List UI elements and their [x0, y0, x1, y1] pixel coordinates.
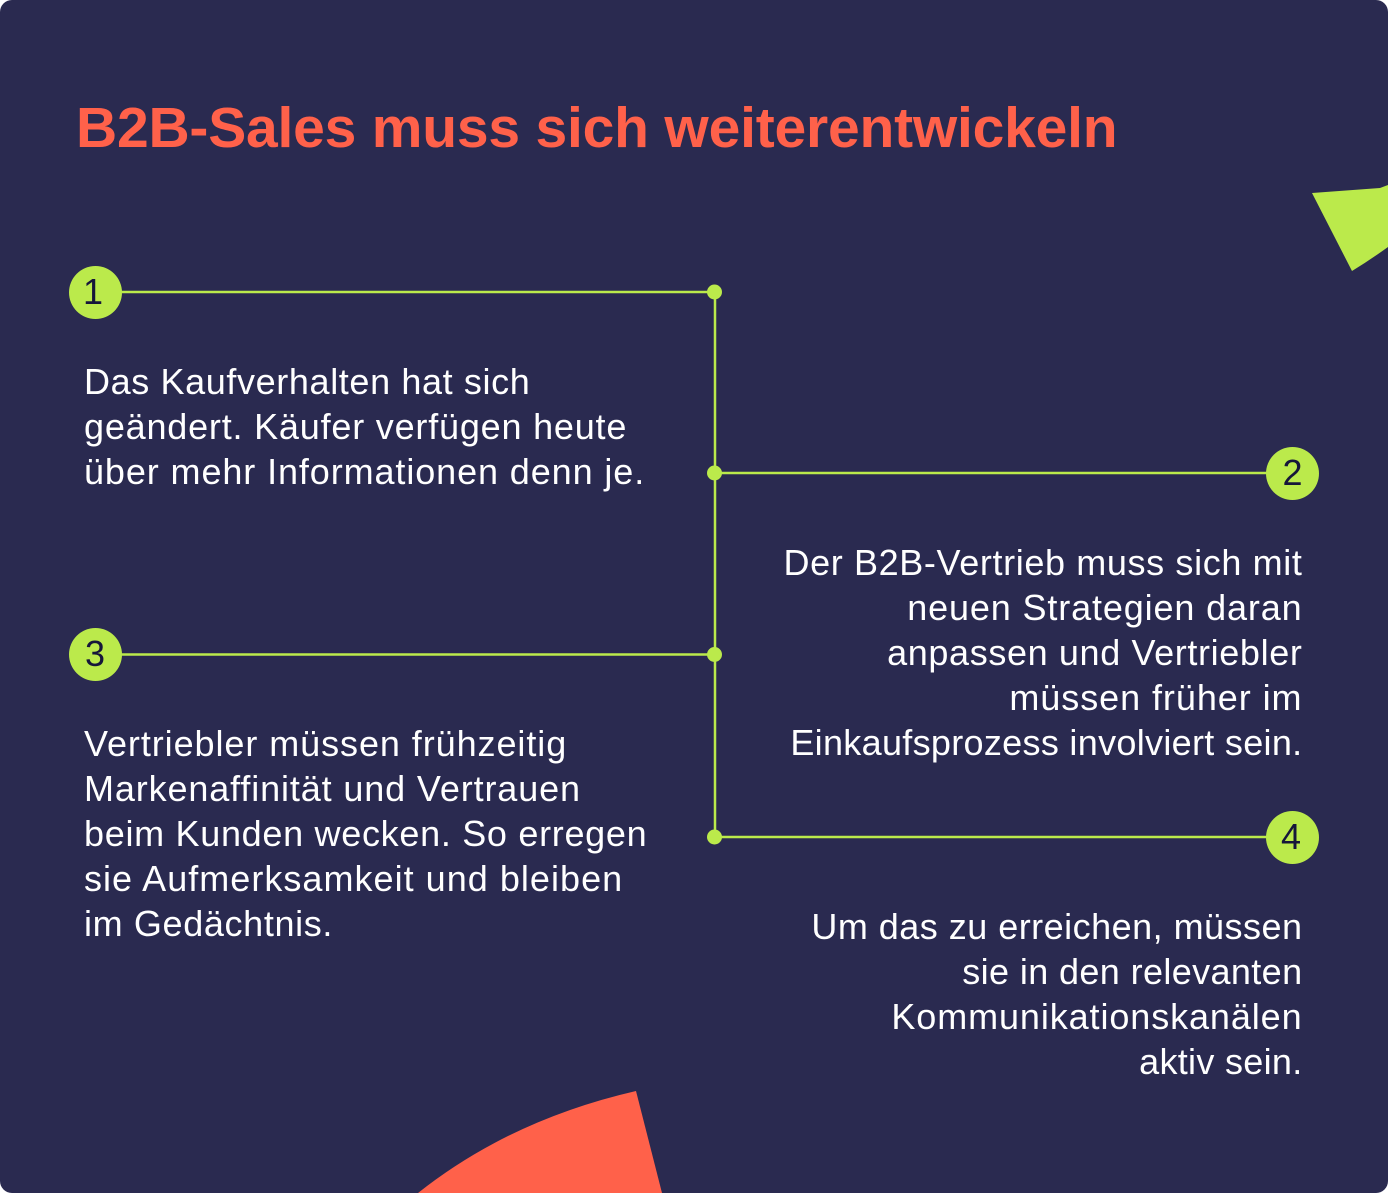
text block 3	[84, 723, 647, 944]
text block 3: sie Aufmerksamkeit und bleiben	[84, 858, 623, 899]
text block 3: Vertriebler müssen frühzeitig	[84, 723, 567, 764]
shape: lime wedge	[1312, 185, 1388, 271]
text block 1	[84, 361, 645, 492]
text block 2: Der B2B-Vertrieb muss sich mit	[783, 542, 1302, 583]
text block 2: Einkaufsprozess involviert sein.	[790, 722, 1302, 763]
number badge 2	[1266, 446, 1319, 500]
text block 2: neuen Strategien daran	[907, 587, 1302, 628]
text block 4	[811, 906, 1302, 1082]
text block 4: aktiv sein.	[1139, 1041, 1302, 1082]
text block 1: über mehr Informationen denn je.	[84, 451, 645, 492]
text block 2: anpassen und Vertriebler	[887, 632, 1302, 673]
text block 2	[783, 542, 1302, 763]
text block 4: Kommunikationskanälen	[891, 996, 1302, 1037]
number badge 2: 2	[1282, 452, 1303, 492]
text block 1: geändert. Käufer verfügen heute	[84, 406, 627, 447]
text block 4: Um das zu erreichen, müssen	[811, 906, 1302, 947]
text block 1: Das Kaufverhalten hat sich	[84, 361, 530, 402]
text block 2: müssen früher im	[1009, 677, 1302, 718]
text block 4: sie in den relevanten	[962, 951, 1302, 992]
text block 3: im Gedächtnis.	[84, 903, 333, 944]
connector lines	[95, 292, 1292, 837]
text block 3: beim Kunden wecken. So erregen	[84, 813, 647, 854]
text block 3: Markenaffinität und Vertrauen	[84, 768, 581, 809]
number badge 1	[68, 266, 122, 318]
number badge 1: 1	[83, 270, 103, 312]
number badge 4: 4	[1281, 816, 1301, 856]
number badge 3	[68, 628, 122, 681]
number badge 3: 3	[85, 633, 105, 674]
shape: coral wedge	[418, 1091, 662, 1193]
number badge 4	[1266, 810, 1319, 864]
connector dots	[707, 284, 722, 844]
title: B2B-Sales muss sich weiterentwickeln	[76, 96, 1117, 160]
